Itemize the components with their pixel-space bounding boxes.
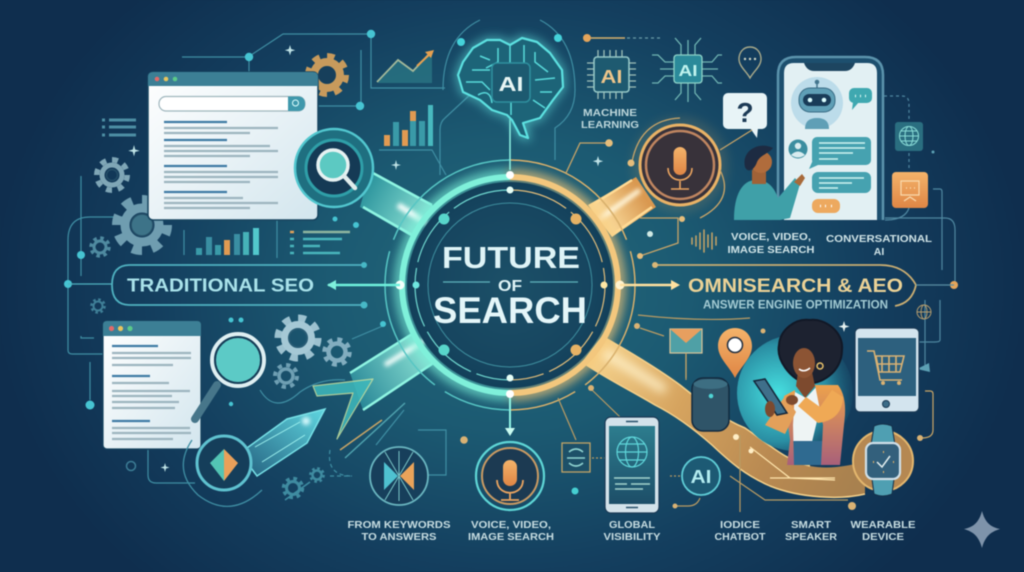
hub disc — [407, 182, 613, 388]
result lines — [164, 122, 278, 208]
label: machine learning: MACHINE — [583, 107, 637, 119]
document lines — [112, 346, 191, 439]
icon: envelope — [670, 329, 702, 378]
hub outer thin ring — [385, 160, 635, 410]
label: conversational ai — [826, 233, 933, 258]
lightning chevron — [313, 379, 373, 439]
title bar — [103, 321, 201, 336]
label: global visibility: GLOBAL — [609, 519, 656, 531]
banner stem — [916, 284, 954, 286]
icon: globe tile — [895, 122, 923, 151]
window frame — [148, 72, 318, 220]
label: from keywords to answers: TO ANSWERS — [362, 531, 436, 543]
gold pathway to wearable — [582, 336, 865, 497]
person: woman with tablet — [754, 320, 845, 465]
banner outline — [655, 265, 916, 306]
label: smart speaker: SMART — [791, 519, 832, 531]
text bars — [614, 478, 650, 489]
top left search window — [148, 72, 318, 220]
tablet — [754, 379, 787, 415]
label: voice video image search top: VOICE, VIDEO, — [731, 231, 811, 243]
gear: tiny — [91, 238, 109, 256]
white shirt — [790, 385, 822, 442]
robot avatar — [791, 77, 843, 129]
panel: conversational phone — [778, 57, 883, 220]
chat bubble second — [812, 172, 871, 193]
icon: question bubble: ? — [736, 97, 754, 128]
banner node — [652, 262, 658, 268]
icon: small tile — [562, 443, 590, 472]
icon: AI chip with pins: AI — [600, 67, 622, 87]
globe — [617, 437, 647, 467]
label: wearable device: DEVICE — [862, 531, 904, 543]
label: global visibility: VISIBILITY — [604, 531, 660, 543]
hands — [765, 395, 798, 417]
bottom left document window — [103, 321, 201, 449]
hub inner rings — [415, 190, 605, 380]
icon: orange chat tile — [892, 172, 928, 208]
label: wearable device — [850, 519, 916, 543]
list icon: left — [102, 120, 136, 135]
gear: large blue gray — [116, 200, 168, 250]
banner nodes — [360, 262, 368, 308]
label: voice video image search top: IMAGE SEARCH — [728, 244, 814, 256]
smile — [799, 368, 810, 371]
icon: microphone badge — [632, 117, 728, 213]
gear: orange top — [308, 56, 346, 94]
banner: traditional seo — [68, 262, 368, 308]
right side connectors — [884, 96, 955, 366]
search bar — [159, 96, 305, 111]
left sleeve — [765, 396, 796, 434]
label: conversational ai: CONVERSATIONAL — [826, 233, 933, 245]
jeans — [788, 441, 824, 465]
title: future: FUTURE — [442, 240, 580, 275]
hub ring — [402, 177, 618, 393]
rocket highlight — [302, 417, 310, 425]
title bar — [148, 72, 318, 86]
rocket diamond — [210, 449, 238, 481]
gear: small gray — [97, 160, 127, 190]
right connector bracket — [922, 391, 933, 438]
rocket body — [240, 409, 325, 476]
lower circuit dots — [460, 323, 856, 510]
right sleeve — [798, 390, 843, 423]
banner title: TRADITIONAL SEO — [127, 274, 314, 296]
ring around watch — [853, 431, 913, 491]
label: voice chatbot: CHATBOT — [714, 531, 766, 543]
icon: location pin — [718, 328, 752, 378]
icon: watermark sparkle — [964, 511, 1000, 548]
gear: under rocket — [284, 478, 302, 498]
label: conversational ai: AI — [874, 246, 884, 258]
label: machine learning — [581, 107, 639, 131]
hub nodes — [396, 171, 624, 398]
sparkles: left — [128, 45, 603, 472]
circuit dots: left and top — [64, 30, 386, 410]
gear: lower medium — [324, 340, 350, 364]
gear: tiny under rocket — [310, 468, 324, 482]
label: voice video image search bottom: VOICE, VIDEO, — [471, 519, 551, 531]
panel: global visibility phone — [605, 417, 659, 513]
chat typing orange — [812, 199, 840, 213]
icon: smart speaker — [692, 378, 729, 431]
gear: left small below banner — [92, 300, 104, 312]
figure glow — [737, 335, 853, 451]
magnifier: top left badge — [295, 129, 373, 207]
phone body — [778, 57, 883, 220]
label: voice video image search top — [728, 231, 814, 256]
banner subtitle: ANSWER ENGINE OPTIMIZATION — [703, 298, 888, 312]
label: voice video image search bottom — [468, 519, 554, 543]
cart wheels — [881, 381, 901, 385]
label: wearable device: WEARABLE — [850, 519, 916, 531]
brain connector nodes — [457, 34, 562, 46]
chat bubble teal — [809, 137, 871, 169]
connector dot — [917, 435, 923, 441]
icon: waveform — [692, 230, 716, 252]
hub: future of search — [385, 160, 635, 410]
user avatar — [788, 140, 808, 158]
tall bar chart — [384, 105, 433, 146]
bar chart: bottom of window — [196, 228, 259, 255]
brain outline — [458, 38, 563, 138]
gear: lower large — [278, 318, 318, 358]
rocket badge — [197, 436, 251, 490]
icon: outline globe right — [917, 305, 931, 319]
title: of: OF — [498, 278, 522, 295]
line chart — [377, 50, 434, 83]
banner: omnisearch and aeo — [652, 262, 954, 312]
label: voice chatbot — [714, 519, 766, 543]
icon: chat pin — [739, 47, 761, 78]
outer arcs — [183, 440, 262, 506]
brain glow — [458, 38, 563, 138]
blazer left panel — [784, 390, 795, 465]
right side arrows and dots — [917, 150, 958, 372]
mic circuit dots — [605, 139, 685, 259]
label: from keywords to answers: FROM KEYWORDS — [348, 519, 450, 531]
icon: microphone lower — [476, 442, 544, 510]
phone notch — [804, 63, 855, 71]
icon: question bubble — [723, 93, 767, 138]
magnifier: lower left — [195, 334, 264, 419]
icon: AI circuit: AI — [678, 63, 698, 80]
rocket arrow — [183, 379, 373, 506]
arrows: from hub to labels and down — [327, 110, 680, 436]
AI chip — [492, 63, 530, 102]
window frame — [103, 321, 201, 449]
AI chip text: AI — [498, 74, 524, 96]
title: search: SEARCH — [433, 290, 587, 331]
label: from keywords to answers — [348, 519, 450, 543]
label: voice chatbot: IODICE — [720, 519, 760, 531]
streaks near rocket — [285, 403, 405, 500]
top connector gold — [583, 34, 660, 42]
window dots — [109, 326, 133, 331]
title dividers — [443, 281, 578, 283]
panel: shopping tablet — [855, 328, 919, 412]
banner left stem — [68, 283, 112, 285]
label: smart speaker: SPEAKER — [785, 531, 837, 543]
icon: keywords to answers — [370, 447, 428, 505]
arm: teal lower left — [350, 334, 434, 410]
mic circuit lines — [566, 118, 752, 256]
gear: lower small — [275, 365, 297, 387]
face — [793, 348, 815, 378]
person: man pointing — [734, 146, 805, 220]
phone screen — [784, 63, 877, 220]
icon: wearable watch — [866, 424, 900, 496]
teal node by phone — [572, 488, 578, 494]
banner title: OMNISEARCH & AEO — [688, 276, 903, 297]
blazer right panel — [815, 385, 845, 465]
icon: AI badge — [682, 457, 720, 495]
label: voice video image search bottom: IMAGE SEARCH — [468, 531, 554, 543]
gear: tiny outline — [126, 462, 136, 470]
banner outline — [112, 265, 365, 305]
brain circuits — [466, 45, 555, 115]
circuit lines: left and top — [68, 20, 575, 483]
rocket trace — [255, 422, 305, 462]
arm: gold upper right — [588, 177, 656, 237]
arm: teal upper left — [360, 171, 436, 238]
sparkle — [838, 321, 850, 332]
hub glow — [400, 175, 620, 395]
cart — [867, 351, 904, 380]
earring — [817, 363, 823, 369]
window dots — [155, 77, 177, 81]
mini legend bars — [290, 232, 350, 253]
label: global visibility — [604, 519, 660, 543]
lower circuits — [558, 315, 848, 512]
robot chat bubble — [849, 88, 872, 110]
icon: AI badge: AI — [690, 467, 712, 487]
label: smart speaker — [785, 519, 837, 543]
icon: AI chip with pins — [587, 50, 636, 99]
label: machine learning: LEARNING — [581, 119, 639, 131]
hair — [779, 320, 842, 383]
icon: AI circuit — [652, 38, 722, 102]
neck — [796, 372, 815, 398]
icon: AI brain — [458, 38, 563, 138]
